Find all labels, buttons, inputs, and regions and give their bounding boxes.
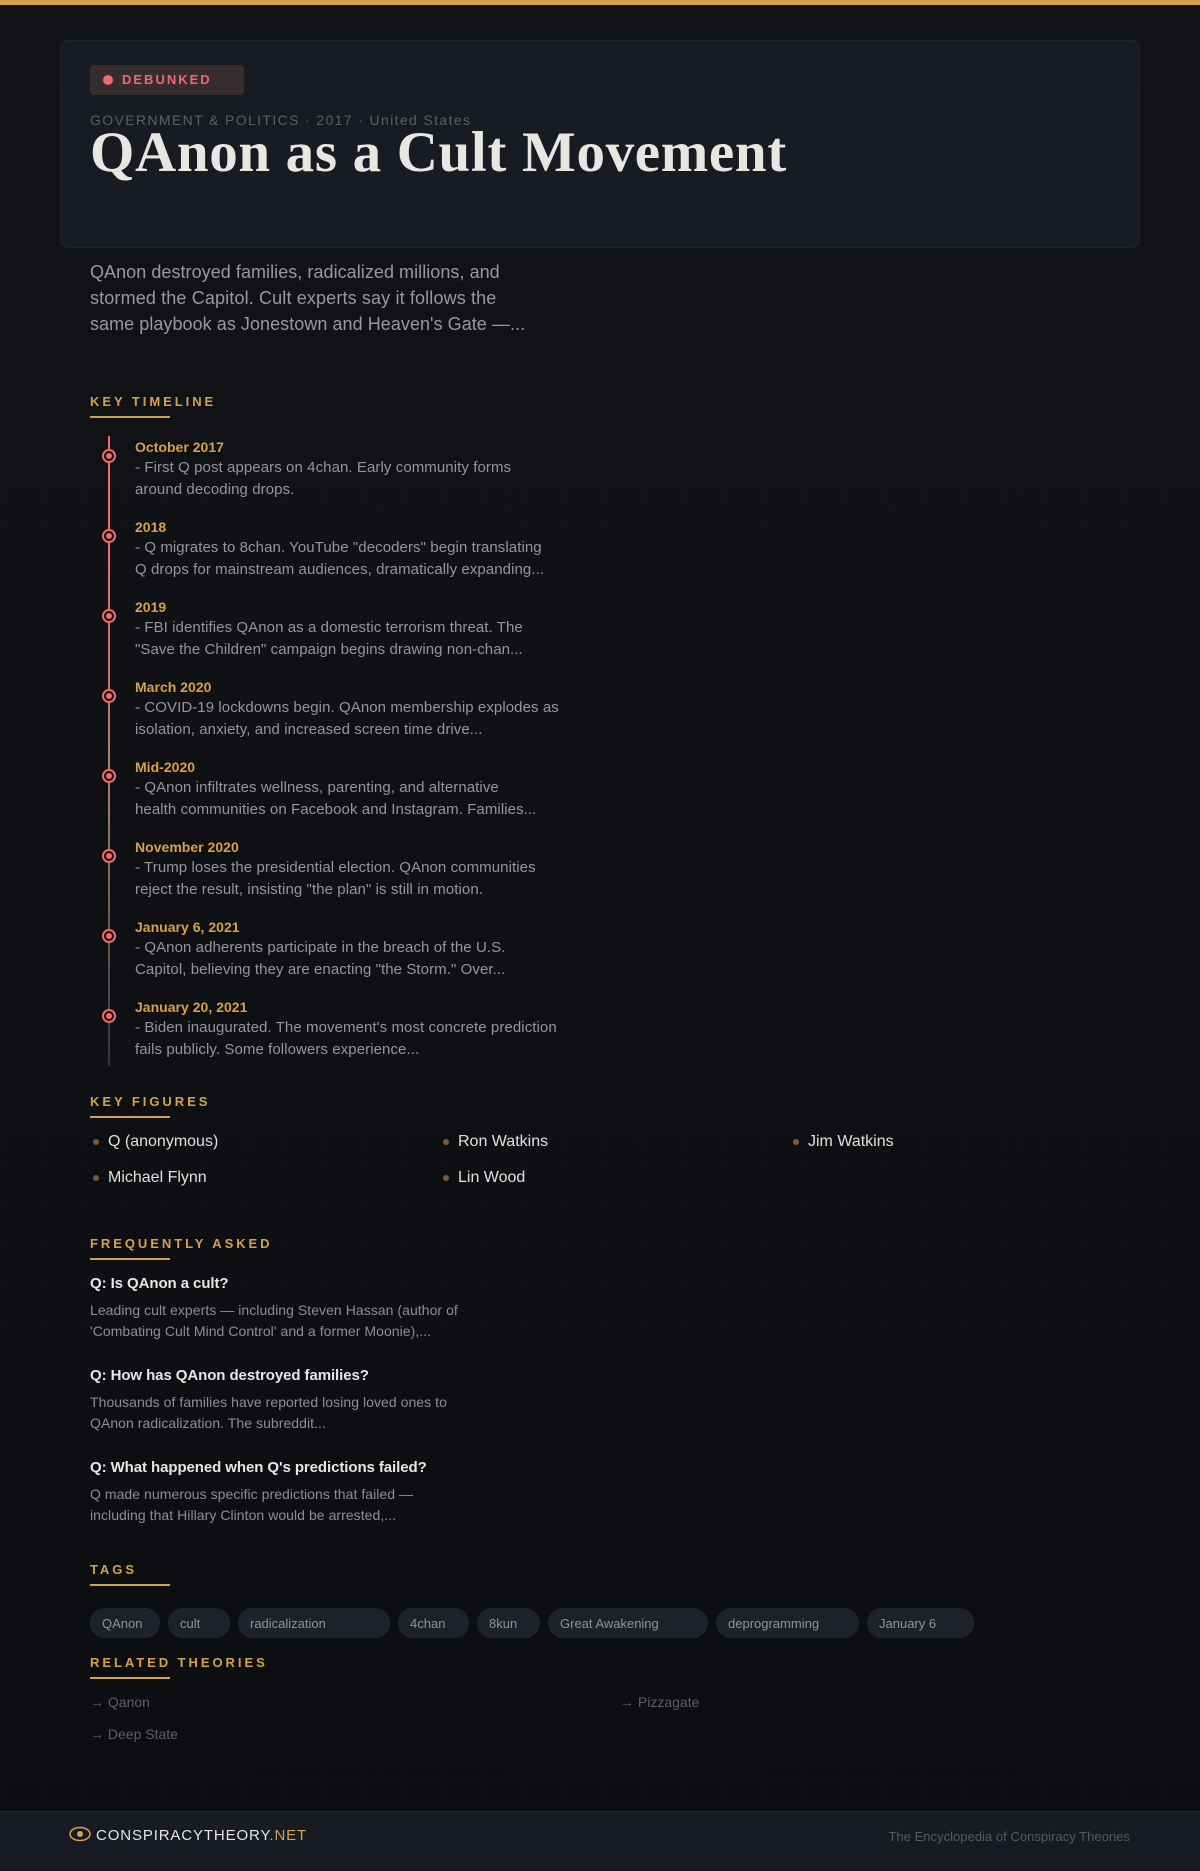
faq 2: QAnon radicalization. The subreddit... <box>90 1415 326 1431</box>
event: January 20, 2021 <box>102 999 557 1058</box>
footer tagline: The Encyclopedia of Conspiracy Theories <box>888 1829 1130 1844</box>
faq 2 <box>90 1367 447 1431</box>
event: October 2017: around decoding drops. <box>135 481 294 498</box>
event: 2018: Q drops for mainstream audiences, dramatically expanding... <box>135 561 544 578</box>
event: November 2020 <box>102 839 536 898</box>
category and date meta line: GOVERNMENT & POLITICS · 2017 · United States <box>90 112 471 128</box>
event: Mid-2020: Mid-2020 <box>135 759 195 775</box>
event: January 6, 2021 <box>102 919 505 978</box>
event: November 2020: reject the result, insisting "the plan" is still in motion. <box>135 881 483 898</box>
key figures list: Q (anonymous) <box>108 1133 218 1150</box>
event: March 2020: - COVID-19 lockdowns begin. QAnon membership explodes as <box>135 699 559 716</box>
event: January 6, 2021: January 6, 2021 <box>135 919 240 935</box>
event: 2019: 2019 <box>135 599 166 615</box>
event: January 20, 2021: January 20, 2021 <box>135 999 247 1015</box>
event: Mid-2020 <box>102 759 536 818</box>
intro description: QAnon destroyed families, radicalized millions, and <box>90 262 500 282</box>
faq 2: Q: How has QAnon destroyed families? <box>90 1367 369 1384</box>
footer wordmark: CONSPIRACYTHEORY.NET <box>96 1827 307 1844</box>
heading: key timeline: KEY TIMELINE <box>90 394 216 409</box>
timeline spine <box>108 436 110 1066</box>
tags list: 4chan <box>410 1616 445 1631</box>
event: 2019: "Save the Children" campaign begins drawing non-chan... <box>135 641 523 658</box>
event: October 2017: October 2017 <box>135 439 224 455</box>
event: March 2020 <box>102 679 559 738</box>
faq 3: Q: What happened when Q's predictions failed? <box>90 1459 427 1476</box>
heading: related theories: RELATED THEORIES <box>90 1655 268 1670</box>
event: January 6, 2021: Capitol, believing they are enacting "the Storm." Over... <box>135 961 505 978</box>
timeline <box>102 436 559 1066</box>
badge dot <box>103 75 113 85</box>
key figures list: Jim Watkins <box>808 1133 894 1150</box>
event: 2018: - Q migrates to 8chan. YouTube "decoders" begin translating <box>135 539 542 556</box>
faq 3: Q made numerous specific predictions that failed — <box>90 1486 413 1502</box>
icon: eye logo <box>69 1826 91 1842</box>
event: October 2017 <box>102 439 511 498</box>
event: 2019 <box>102 599 523 658</box>
heading: tags: TAGS <box>90 1562 137 1577</box>
heading: frequently asked: FREQUENTLY ASKED <box>90 1236 273 1251</box>
panel: header <box>60 40 1140 248</box>
status badge: debunked <box>90 65 244 95</box>
tags list: radicalization <box>250 1616 326 1631</box>
tags list: Great Awakening <box>560 1616 659 1631</box>
related theories list <box>90 1694 699 1742</box>
faq 1: Leading cult experts — including Steven Hassan (author of <box>90 1302 458 1318</box>
related theories list: → Deep State <box>90 1726 178 1742</box>
event: 2018 <box>102 519 544 578</box>
tags list: deprogramming <box>728 1616 819 1631</box>
related theories list: → Qanon <box>90 1694 150 1710</box>
footer <box>0 1811 1200 1871</box>
faq 1: Q: Is QAnon a cult? <box>90 1275 228 1292</box>
key figures list: Lin Wood <box>458 1169 525 1186</box>
heading: key figures: KEY FIGURES <box>90 1094 210 1109</box>
intro description <box>90 262 525 334</box>
tags list: cult <box>180 1616 200 1631</box>
event: Mid-2020: - QAnon infiltrates wellness, parenting, and alternative <box>135 779 499 796</box>
key figures list: Ron Watkins <box>458 1133 548 1150</box>
key figures list: Michael Flynn <box>108 1169 207 1186</box>
title: QAnon as a Cult Movement <box>90 121 787 184</box>
event: March 2020: isolation, anxiety, and increased screen time drive... <box>135 721 483 738</box>
tags list <box>90 1608 974 1638</box>
related theories list: → Pizzagate <box>620 1694 699 1710</box>
event: January 20, 2021: fails publicly. Some followers experience... <box>135 1041 419 1058</box>
faq 1: 'Combating Cult Mind Control' and a former Moonie),... <box>90 1323 431 1339</box>
faq 3 <box>90 1459 427 1523</box>
tags list: January 6 <box>879 1616 936 1631</box>
intro description: stormed the Capitol. Cult experts say it follows the <box>90 288 496 308</box>
key figures list <box>93 1133 894 1186</box>
intro description: same playbook as Jonestown and Heaven's Gate —... <box>90 314 525 334</box>
event: January 6, 2021: - QAnon adherents participate in the breach of the U.S. <box>135 939 505 956</box>
tags list: 8kun <box>489 1616 517 1631</box>
tags list: QAnon <box>102 1616 142 1631</box>
event: October 2017: - First Q post appears on 4chan. Early community forms <box>135 459 511 476</box>
event: 2018: 2018 <box>135 519 166 535</box>
event: Mid-2020: health communities on Facebook and Instagram. Families... <box>135 801 536 818</box>
event: 2019: - FBI identifies QAnon as a domestic terrorism threat. The <box>135 619 523 636</box>
faq 2: Thousands of families have reported losing loved ones to <box>90 1394 447 1410</box>
event: March 2020: March 2020 <box>135 679 211 695</box>
event: January 20, 2021: - Biden inaugurated. The movement's most concrete prediction <box>135 1019 557 1036</box>
badge text: DEBUNKED <box>122 72 212 87</box>
top accent bar <box>0 0 1200 5</box>
faq 1 <box>90 1275 458 1339</box>
event: November 2020: - Trump loses the presidential election. QAnon communities <box>135 859 536 876</box>
event: November 2020: November 2020 <box>135 839 239 855</box>
faq 3: including that Hillary Clinton would be arrested,... <box>90 1507 396 1523</box>
